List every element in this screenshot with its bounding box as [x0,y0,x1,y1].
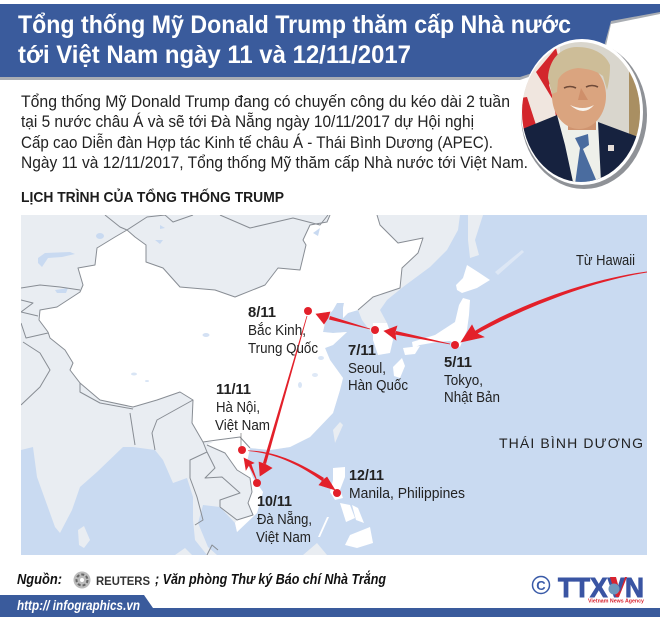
icon: Reuters logo [74,572,90,588]
title [18,11,571,69]
label: Da Nang: Việt Nam [256,530,311,546]
label: Beijing [248,305,318,357]
label: from Hawaii: Từ Hawaii [576,253,635,269]
label: Beijing: Trung Quốc [248,341,318,357]
label: Beijing: Bắc Kinh, [248,322,306,339]
label: Beijing: 8/11 [248,305,276,321]
label: Manila [349,468,465,502]
route arrow: Hanoi to Manila [248,450,335,490]
source line: REUTERS [96,574,150,588]
label: Da Nang [256,494,312,546]
introduction text block: Cấp cao Diễn đàn Hợp tác Kinh tế châu Á - Thái Bình Dương (APEC). [21,133,493,152]
label: Hanoi: Hà Nội, [216,400,260,416]
source line: ; Văn phòng Thư ký Báo chí Nhà Trắng [155,570,386,588]
label: Seoul: Seoul, [348,361,386,377]
label: Tokyo: 5/11 [444,355,472,371]
islands [78,215,524,555]
label: Da Nang: Đà Nẵng, [257,511,312,528]
TTXVN logo: TTXVN [558,572,644,603]
route arrow: Tokyo to Seoul [384,326,450,344]
title: Tổng thống Mỹ Donald Trump thăm cấp Nhà nước [18,11,571,39]
route arrow: Da Nang to Hanoi [244,458,257,480]
label: Tokyo: Tokyo, [444,373,483,389]
label: Hanoi: Việt Nam [215,418,270,434]
location dots [238,307,459,497]
label: Da Nang: 10/11 [257,494,292,510]
label: Seoul [348,343,408,394]
TTXVN logo: Vietnam News Agency [588,598,645,604]
label: Seoul: Hàn Quốc [348,378,408,394]
introduction text block: Tổng thống Mỹ Donald Trump đang có chuyến công du kéo dài 2 tuần [21,92,510,111]
route arrow: Seoul to Beijing [316,312,370,329]
source line [17,570,386,588]
title: tới Việt Nam ngày 11 và 12/11/2017 [18,41,411,69]
introduction text block: Ngày 11 và 12/11/2017, Tổng thống Mỹ thăm cấp Nhà nước tới Việt Nam. [21,153,528,172]
label: Tokyo [444,355,500,406]
land: South Korea and Japan [318,265,490,548]
website link: http:// infographics.vn [17,597,140,613]
lakes [38,225,324,388]
label: Manila: 12/11 [349,468,384,484]
header banner [0,4,660,80]
land: Vietnam [207,437,263,532]
label: Manila: Manila, Philippines [349,486,465,502]
map of Asia-Pacific [21,215,647,555]
TTXVN logo: C [536,578,546,593]
introduction text block: tại 5 nước châu Á và sẽ tới Đà Nẵng ngày 10/11/2017 dự Hội nghị [21,112,474,131]
label: Pacific Ocean: THÁI BÌNH DƯƠNG [499,435,643,451]
land: Eurasia [21,215,460,555]
footer bar [0,595,660,617]
section heading: LỊCH TRÌNH CỦA TỔNG THỐNG TRUMP [21,188,284,206]
source line: Nguồn: [17,572,62,588]
label: Hanoi: 11/11 [216,382,251,398]
route arrow: Beijing to Da Nang [259,316,307,476]
introduction text block [21,92,528,172]
label: Seoul: 7/11 [348,343,376,359]
portrait photo of Donald Trump [520,39,650,190]
route arrow: Hawaii to Tokyo [461,272,647,342]
map labels [215,253,643,546]
Hanoi leader line [240,433,242,446]
label: Tokyo: Nhật Bản [444,390,500,406]
borders [21,215,423,555]
land: China [39,215,423,450]
label: Hanoi [215,382,270,434]
